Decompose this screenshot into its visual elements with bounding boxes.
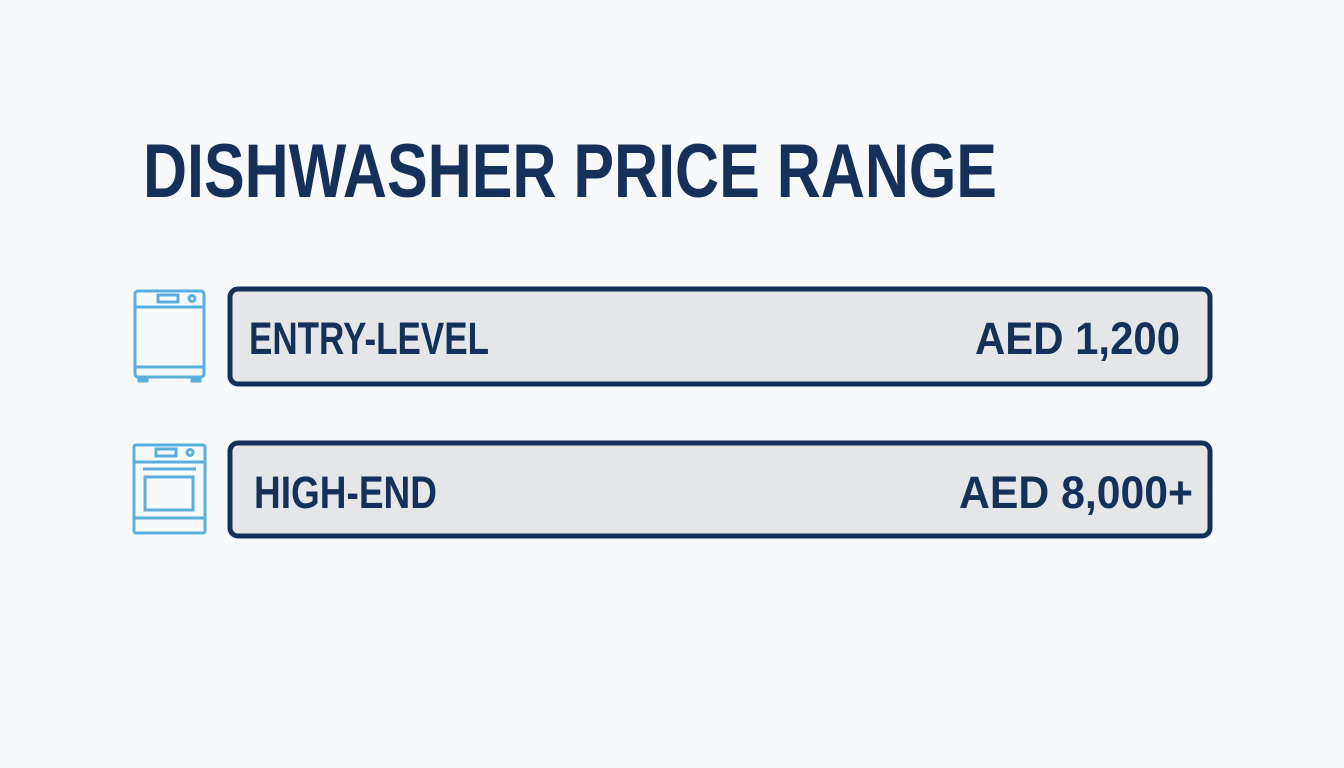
row: high-end: HIGH-END	[254, 467, 437, 518]
row: high-end	[230, 443, 1210, 536]
icon: oven	[134, 445, 205, 533]
row: entry-level: AED 1,200	[975, 313, 1180, 364]
row: entry-level: ENTRY-LEVEL	[249, 313, 489, 364]
title: DISHWASHER PRICE RANGE	[143, 129, 997, 214]
row: high-end: AED 8,000+	[959, 467, 1193, 518]
row: entry-level	[230, 289, 1210, 384]
icon: dishwasher	[135, 291, 204, 381]
